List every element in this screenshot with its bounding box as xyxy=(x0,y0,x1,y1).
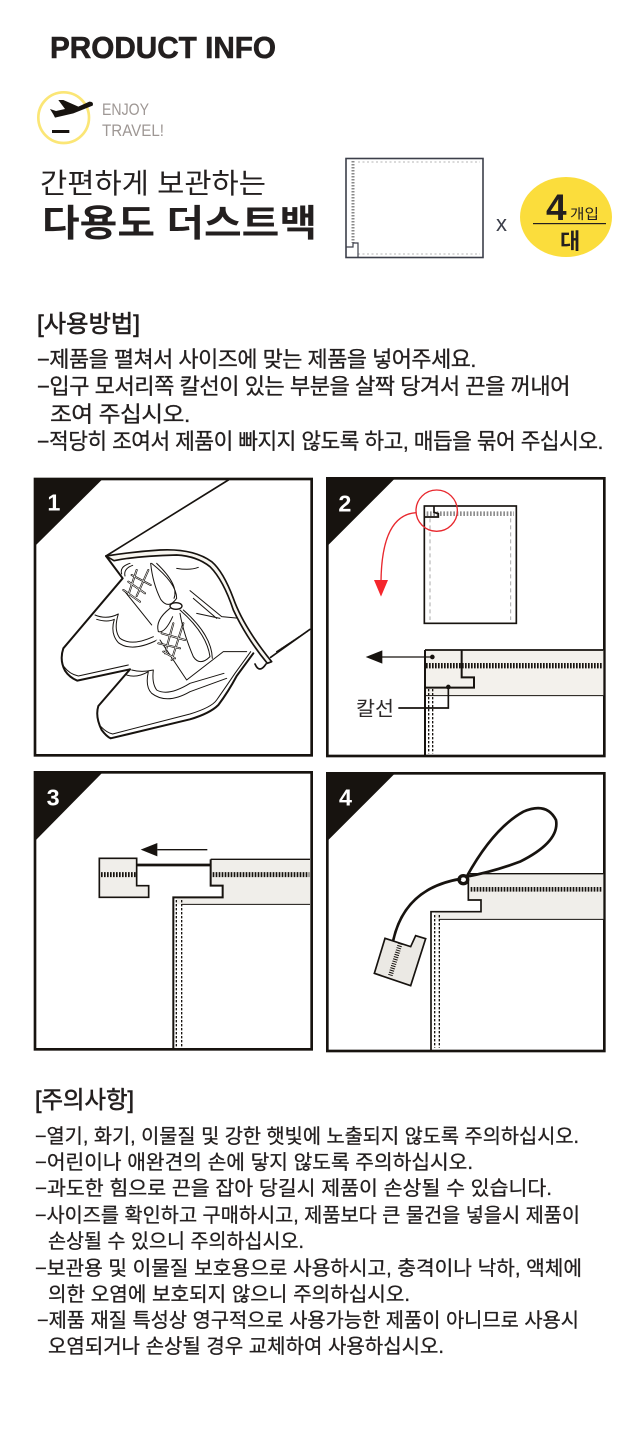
text block: cautions list: −사이즈를 확인하고 구매하시고, 제품보다 큰 물건을 넣을시 제품이 xyxy=(35,1204,580,1227)
heading: cautions: [주의사항] xyxy=(35,1087,134,1114)
panel: step 1 shoes going into bag xyxy=(35,479,312,755)
badge: 4 pack: 대 xyxy=(560,229,580,254)
text block: usage instructions: −제품을 펼쳐서 사이즈에 맞는 제품을 넣어주세요. xyxy=(37,347,476,372)
panel: step 4 tie the cord xyxy=(327,773,604,1051)
step badge 2 xyxy=(327,478,395,546)
tagline: enjoy travel: ENJOY xyxy=(102,100,149,119)
illustration: bag and shoes xyxy=(62,480,310,738)
step badge 3: 3 xyxy=(47,785,60,811)
title: PRODUCT INFO xyxy=(50,30,276,65)
left shoe xyxy=(62,562,233,681)
illustration: tag xyxy=(374,936,426,986)
step badge 1: 1 xyxy=(47,490,60,516)
icon: airplane badge xyxy=(38,92,93,143)
step badge 4 xyxy=(327,773,395,841)
illustration: bag corner xyxy=(431,874,603,1050)
multiply sign: x xyxy=(496,211,507,236)
red circle and arrow xyxy=(374,490,457,597)
illustration: small bag with tab xyxy=(424,506,516,623)
arrow and marker dots xyxy=(366,650,451,689)
text block: cautions list: 손상될 수 있으니 주의하십시오. xyxy=(48,1230,304,1253)
illustration: tab pulled off with cord xyxy=(99,843,310,1048)
badge: 4 pack: 개입 xyxy=(570,206,599,222)
text block: cautions list: 의한 오염에 보호되지 않으니 주의하십시오. xyxy=(48,1283,410,1306)
tagline: enjoy travel: TRAVEL! xyxy=(102,121,164,140)
right shoe laces xyxy=(158,623,185,660)
step badge 3 xyxy=(35,772,103,841)
text block: cautions list: −제품 재질 특성상 영구적으로 사용가능한 제품이 아니므로 사용시 xyxy=(37,1309,579,1332)
icon: flat dust bag xyxy=(346,158,483,258)
text block: cautions list: −어린이나 애완견의 손에 닿지 않도록 주의하십시오. xyxy=(35,1151,473,1174)
bag opening band xyxy=(106,550,272,663)
text block: cautions list xyxy=(35,1125,582,1358)
label: cut line: 칼선 xyxy=(356,698,394,721)
product name heading: 다용도 더스트백 xyxy=(42,203,317,244)
step badge 1 xyxy=(35,479,103,546)
text block: cautions list: −과도한 힘으로 끈을 잡아 당길시 제품이 손상될 수 있습니다. xyxy=(35,1177,552,1200)
heading: how to use: [사용방법] xyxy=(37,311,140,338)
text block: cautions list: −보관용 및 이물질 보호용으로 사용하시고, 충격이나 낙하, 액체에 xyxy=(35,1257,582,1280)
step badge 2: 2 xyxy=(338,490,351,516)
tagline: enjoy travel xyxy=(102,100,164,140)
text block: cautions list: 오염되거나 손상될 경우 교체하여 사용하십시오. xyxy=(48,1335,444,1358)
text block: usage instructions xyxy=(37,347,603,454)
illustration: tab close-up xyxy=(382,650,603,755)
illustration: cord and knot xyxy=(393,808,556,940)
panel: step 2 find the tab xyxy=(327,478,604,756)
text block: usage instructions: −적당히 조여서 제품이 빠지지 않도록 하고, 매듭을 묶어 주십시오. xyxy=(37,429,603,454)
text block: cautions list: −열기, 화기, 이물질 및 강한 햇빛에 노출되지 않도록 주의하십시오. xyxy=(35,1125,579,1148)
panel: step 3 pull the tab xyxy=(35,772,312,1049)
subtitle: 간편하게 보관하는 xyxy=(40,168,266,199)
text block: usage instructions: 조여 주십시오. xyxy=(50,402,190,427)
right shoe xyxy=(97,592,253,738)
step badge 4: 4 xyxy=(339,785,352,811)
text block: usage instructions: −입구 모서리쪽 칼선이 있는 부분을 살짝 당겨서 끈을 꺼내어 xyxy=(37,374,570,399)
badge: 4 pack xyxy=(520,177,612,257)
badge: 4 pack: 4 xyxy=(546,187,567,228)
left shoe laces xyxy=(123,570,151,602)
